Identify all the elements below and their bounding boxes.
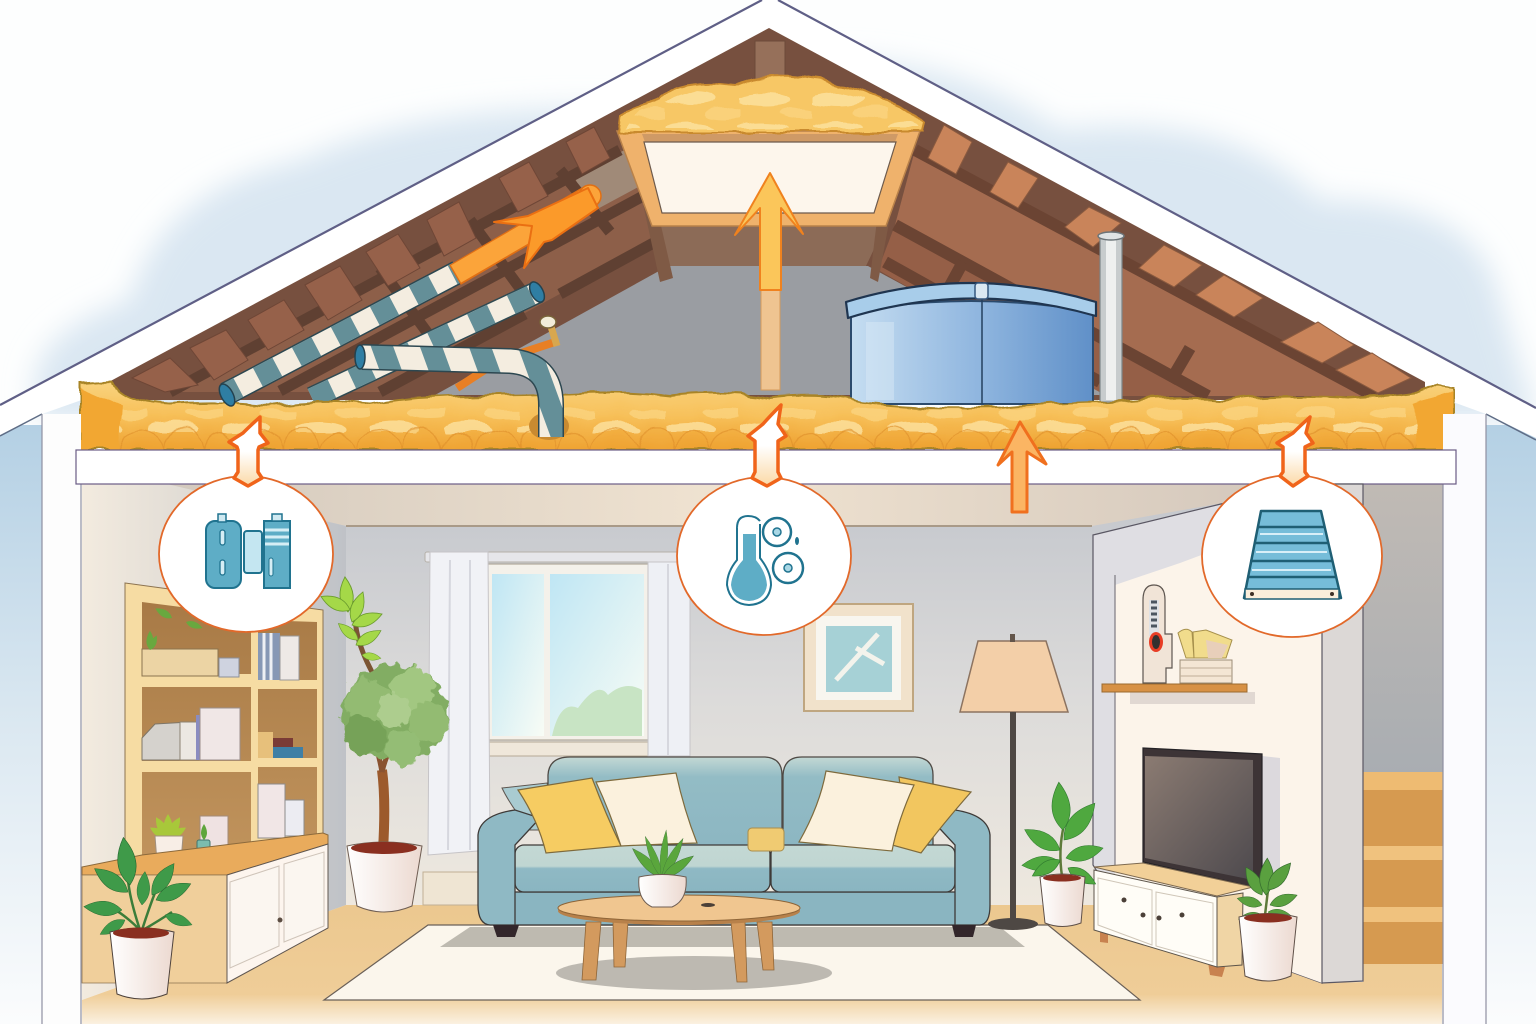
- icon: insulation rolls: [206, 514, 290, 588]
- feet: [493, 925, 976, 937]
- left beams: [170, 150, 668, 392]
- callout circle: thermometer icon: [677, 477, 851, 635]
- hatch insulation mound: [617, 77, 922, 132]
- thermostat: [1143, 585, 1172, 683]
- vertical arrow through hatch: [735, 173, 803, 390]
- ceiling: [82, 484, 1372, 526]
- coffee table: [558, 895, 800, 982]
- shelf with thermostat and books: [1102, 585, 1247, 692]
- framed picture: [804, 604, 913, 711]
- stacked books and folders: [1178, 629, 1232, 683]
- TV cabinet: [1094, 863, 1253, 977]
- attic interior: [105, 28, 1425, 400]
- room: [82, 484, 1443, 1024]
- left potted plant: [83, 836, 194, 999]
- large potted tree: [318, 576, 449, 912]
- pipe: rear striped duct: [312, 279, 547, 398]
- sofa back cushions: [548, 757, 782, 848]
- left planks: [170, 150, 668, 392]
- light band left: [575, 148, 642, 213]
- roof blocks left: [132, 127, 610, 392]
- cushions: [518, 778, 621, 853]
- roof band: [0, 0, 1536, 440]
- ridge post: [755, 41, 785, 96]
- hole in insulation: [529, 412, 569, 440]
- rug: [324, 925, 1140, 1000]
- stairs: [1363, 772, 1443, 964]
- orange warm air arrow leaving duct: [455, 185, 601, 275]
- side walls exterior: [0, 425, 1536, 1024]
- hatch lining panel: [652, 226, 885, 266]
- callout circle: insulation batts icon: [159, 476, 333, 632]
- chimney wall panel: [1093, 480, 1363, 983]
- table shadow: [556, 956, 832, 990]
- pipe: long striped duct: [216, 272, 458, 408]
- left white wall post: [42, 414, 81, 1024]
- floor: [82, 905, 1442, 1024]
- floor lamp: [960, 634, 1068, 930]
- left wall: [82, 484, 346, 1000]
- insulation layer on attic floor: [80, 382, 1453, 450]
- roof blocks right: [928, 125, 1411, 393]
- pipe: bent striped duct entering insulation: [355, 345, 551, 437]
- callout circle: vent icon: [1202, 475, 1382, 637]
- low cabinet under bookcase: [82, 833, 328, 983]
- bookcase: [125, 583, 323, 863]
- heat arrow 4: [1277, 417, 1313, 486]
- heat arrow 2: [748, 405, 786, 486]
- small valve and orange pipe: [457, 316, 557, 388]
- corner potted plant by lamp: [1021, 781, 1105, 926]
- vent pipe: [1098, 232, 1124, 402]
- water tank: [846, 283, 1096, 404]
- television: [1143, 748, 1262, 887]
- right white wall post: [1443, 414, 1486, 1024]
- sofa shadow: [440, 927, 1025, 947]
- attic back wall: [435, 266, 1105, 395]
- attic hatch frame: [617, 131, 920, 226]
- hatch braces: [640, 190, 895, 282]
- left pillow behind: [502, 783, 560, 830]
- window with curtains: [423, 552, 691, 905]
- beam below insulation: [76, 450, 1456, 484]
- table plant: [629, 830, 696, 907]
- right beams: [885, 150, 1374, 396]
- far right area: [1363, 484, 1443, 774]
- books and boxes: [142, 633, 304, 863]
- shelf top plant and ivy: [146, 598, 204, 651]
- item on sofa: [748, 828, 784, 851]
- right planks: [895, 150, 1374, 396]
- icon: thermometer and gauges: [727, 516, 803, 605]
- back wall: [82, 484, 1372, 914]
- sofa: [478, 757, 990, 937]
- icon: roof vent: [1244, 511, 1341, 599]
- sofa base: [510, 892, 960, 925]
- sofa arms: [478, 810, 540, 925]
- heat arrow 3 large: [998, 422, 1046, 512]
- rafter triangle: [105, 28, 1425, 400]
- shelf plant pot: [148, 814, 188, 862]
- seat cushions: [515, 845, 770, 892]
- right potted plant: [1236, 858, 1299, 981]
- heat arrow 1: [229, 417, 268, 486]
